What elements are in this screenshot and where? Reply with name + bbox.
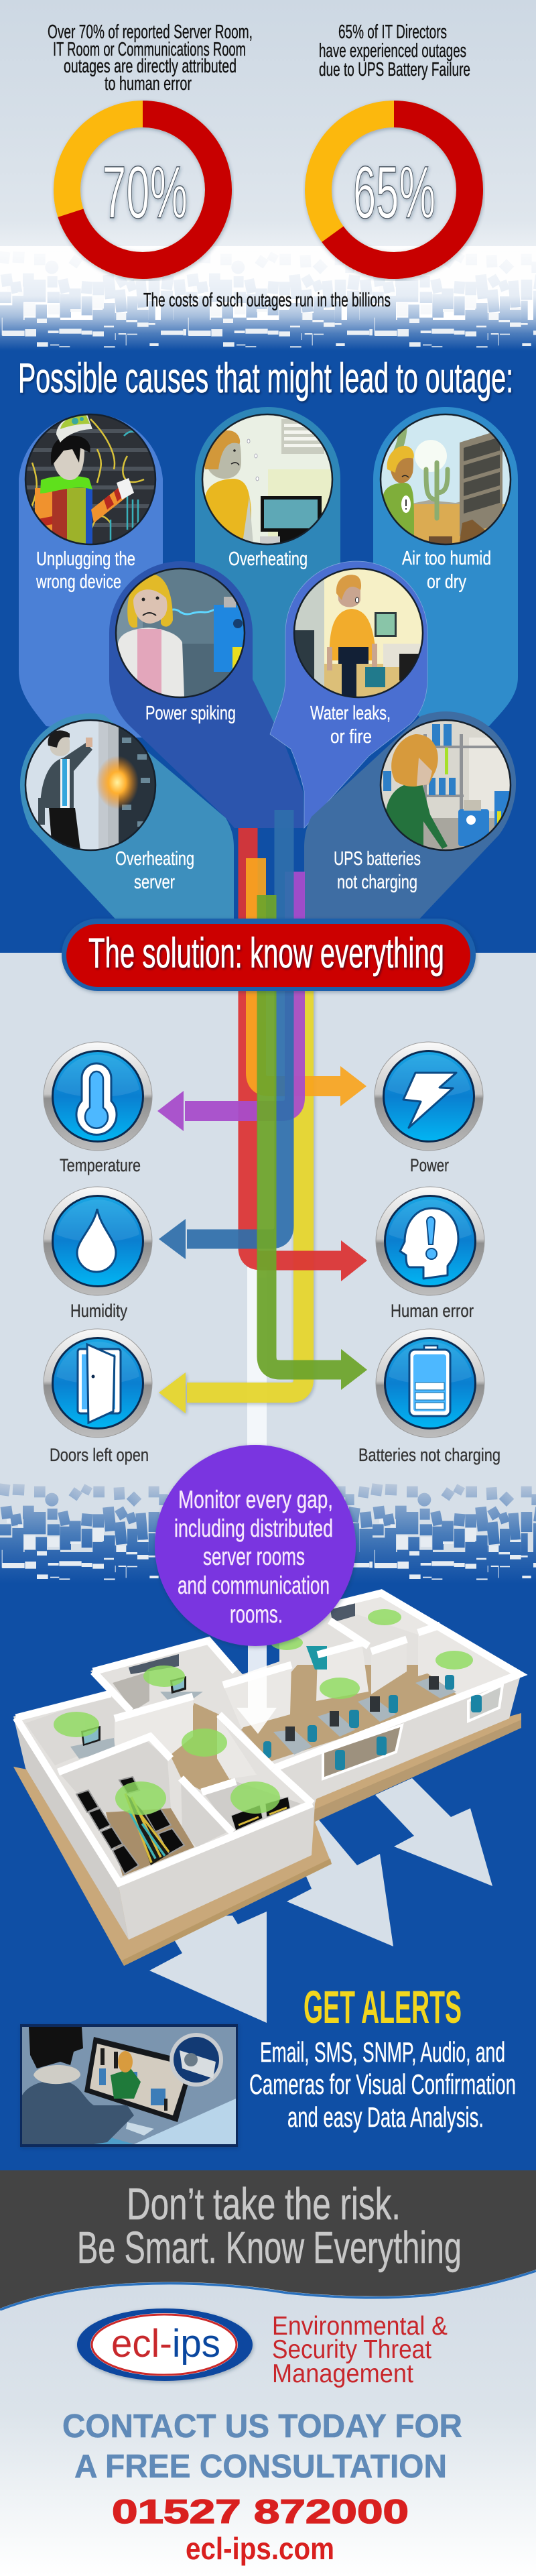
- label: [334, 848, 421, 893]
- arrow: red to human error: [248, 828, 367, 1281]
- icon label: humidity: Humidity: [70, 1301, 127, 1321]
- text: contact us: CONTACT US TODAY FOR: [62, 2408, 462, 2445]
- panel: water leaks or fire: [270, 561, 427, 828]
- icon: humidity: [44, 1187, 152, 1295]
- label: [310, 703, 391, 748]
- illustration: worker in a leaking room: [294, 569, 426, 701]
- arrow: orange to power: [256, 858, 366, 1106]
- panel: air too humid or dry: [373, 407, 518, 726]
- panel: power spiking: [109, 561, 304, 828]
- arrow: alert arrow middle: [287, 1818, 393, 1946]
- text: environmental and security threat management: Environmental &: [272, 2312, 448, 2341]
- motion sensor zones: [54, 1609, 473, 1815]
- panel: UPS batteries not charging: [304, 711, 516, 925]
- text: environmental and security threat management: [272, 2312, 448, 2388]
- logo: ecl-ips: [77, 2308, 253, 2381]
- background: monitoring blue section: [0, 1585, 536, 2175]
- illustration: man at server with fire: [25, 720, 155, 850]
- icon label: human error: Human error: [391, 1301, 474, 1321]
- label: Power spiking: [145, 703, 236, 724]
- label: server: [134, 872, 175, 893]
- wall tops: [16, 1593, 519, 1883]
- background: causes blue section: [0, 352, 536, 953]
- background: top light section: [0, 0, 536, 355]
- text: contact us: [62, 2408, 462, 2485]
- logo: ecl-ips: ecl-ips: [111, 2322, 220, 2365]
- section: dark call to action: [0, 2170, 536, 2308]
- callout: monitor every gap: including distributed: [174, 1515, 333, 1542]
- arrow: alert arrow right: [375, 1778, 492, 1886]
- illustration: operator viewing alerts on screen: [20, 2024, 238, 2147]
- text: UPS battery statistic: 65% of IT Directors: [338, 21, 447, 43]
- panel: unplugging the wrong device: [19, 413, 163, 738]
- text: human error statistic: IT Room or Communications Room: [53, 39, 246, 60]
- arrow: yellow to doors: [159, 965, 304, 1413]
- server racks: [76, 1777, 184, 1874]
- donut value: 70%: 70%: [103, 152, 188, 234]
- text: human error statistic: Over 70% of reported Server Room,: [48, 21, 253, 43]
- text: environmental and security threat management: Security Threat: [272, 2335, 431, 2364]
- label: [402, 548, 491, 593]
- icon: temperature: [44, 1042, 152, 1151]
- text: environmental and security threat management: Management: [272, 2359, 413, 2388]
- donut value: 65%: 65%: [353, 152, 436, 234]
- label: Overheating: [115, 848, 194, 870]
- text: phone number: 01527 872000: [112, 2493, 409, 2530]
- callout: monitor every gap: Monitor every gap,: [178, 1486, 333, 1513]
- corridor floor: [171, 1703, 231, 1790]
- panel: overheating server: [20, 713, 234, 925]
- building: office floor plan: [13, 1591, 521, 1966]
- label: [115, 848, 194, 893]
- icon: batteries not charging: [376, 1329, 484, 1438]
- white vertical channel: [247, 1267, 267, 1448]
- icon label: temperature: Temperature: [60, 1155, 141, 1175]
- windows: [323, 1725, 402, 1779]
- label: [36, 548, 135, 593]
- illustration: power spike with battery: [116, 569, 245, 697]
- text: human error statistic: outages are directly attributed: [64, 56, 237, 77]
- room interior walls: [25, 1694, 127, 1765]
- callout: monitor every gap: [155, 1445, 356, 1646]
- icon: doors left open: [44, 1329, 152, 1438]
- callout: monitor every gap: server rooms: [203, 1543, 305, 1570]
- banner: the solution: [62, 919, 476, 991]
- arrow: alert arrow left: [149, 1912, 267, 2023]
- icon: power: [375, 1042, 483, 1151]
- footer background: [0, 2272, 536, 2576]
- label: UPS batteries: [334, 848, 421, 870]
- donut chart: 70 percent: [67, 114, 218, 266]
- callout: monitor every gap: and communication: [178, 1572, 330, 1599]
- workstations: [70, 1678, 456, 1759]
- label: wrong device: [36, 571, 121, 593]
- icon label: doors left open: Doors left open: [50, 1445, 149, 1465]
- label: not charging: [337, 872, 417, 893]
- illustration: desert server rack: [381, 414, 511, 546]
- background: solution light section: [0, 953, 536, 1587]
- panel: overheating: [195, 407, 340, 734]
- illustration: woman at battery racks: [381, 720, 511, 850]
- mosaic band: top: [0, 246, 536, 354]
- floor slab: [13, 1713, 521, 1966]
- text: cost of outages: The costs of such outages run in the billions: [143, 290, 391, 311]
- label: or fire: [330, 726, 372, 748]
- label: Water leaks,: [310, 703, 391, 724]
- arrow: green to batteries: [267, 895, 367, 1390]
- text: human error statistic: [48, 21, 253, 95]
- label: Unplugging the: [36, 548, 135, 570]
- icon label: batteries not charging: Batteries not charging: [358, 1445, 500, 1465]
- exterior walls: [13, 1716, 129, 1940]
- arrow: purple to temperature: [157, 872, 295, 1131]
- icon: human error: [376, 1187, 484, 1295]
- text: contact us: A FREE CONSULTATION: [74, 2449, 447, 2485]
- callout: monitor every gap: rooms.: [230, 1600, 283, 1628]
- label: or dry: [427, 571, 466, 593]
- illustration: clown unplugging cables: [25, 414, 155, 548]
- text: UPS battery statistic: [319, 21, 470, 80]
- icon label: power: Power: [410, 1155, 449, 1175]
- donut chart: 65 percent: [318, 114, 470, 266]
- text: human error statistic: to human error: [105, 73, 192, 95]
- text: website: ecl-ips.com: [186, 2531, 334, 2566]
- label: Overheating: [228, 548, 308, 570]
- illustration: overheating office worker: [202, 414, 332, 546]
- decorative wave edge: [0, 2271, 536, 2310]
- text: alert channels: [249, 2036, 516, 2133]
- mosaic band: middle: [0, 1483, 536, 1586]
- label: Air too humid: [402, 548, 491, 569]
- interior base: [13, 1591, 521, 1886]
- right wing floor: [241, 1665, 469, 1761]
- arrow: blue to humidity: [159, 810, 284, 1259]
- section: dark call to action: Don’t take the risk.: [127, 2179, 401, 2229]
- arrow: white down arrow into building: [237, 1636, 277, 1734]
